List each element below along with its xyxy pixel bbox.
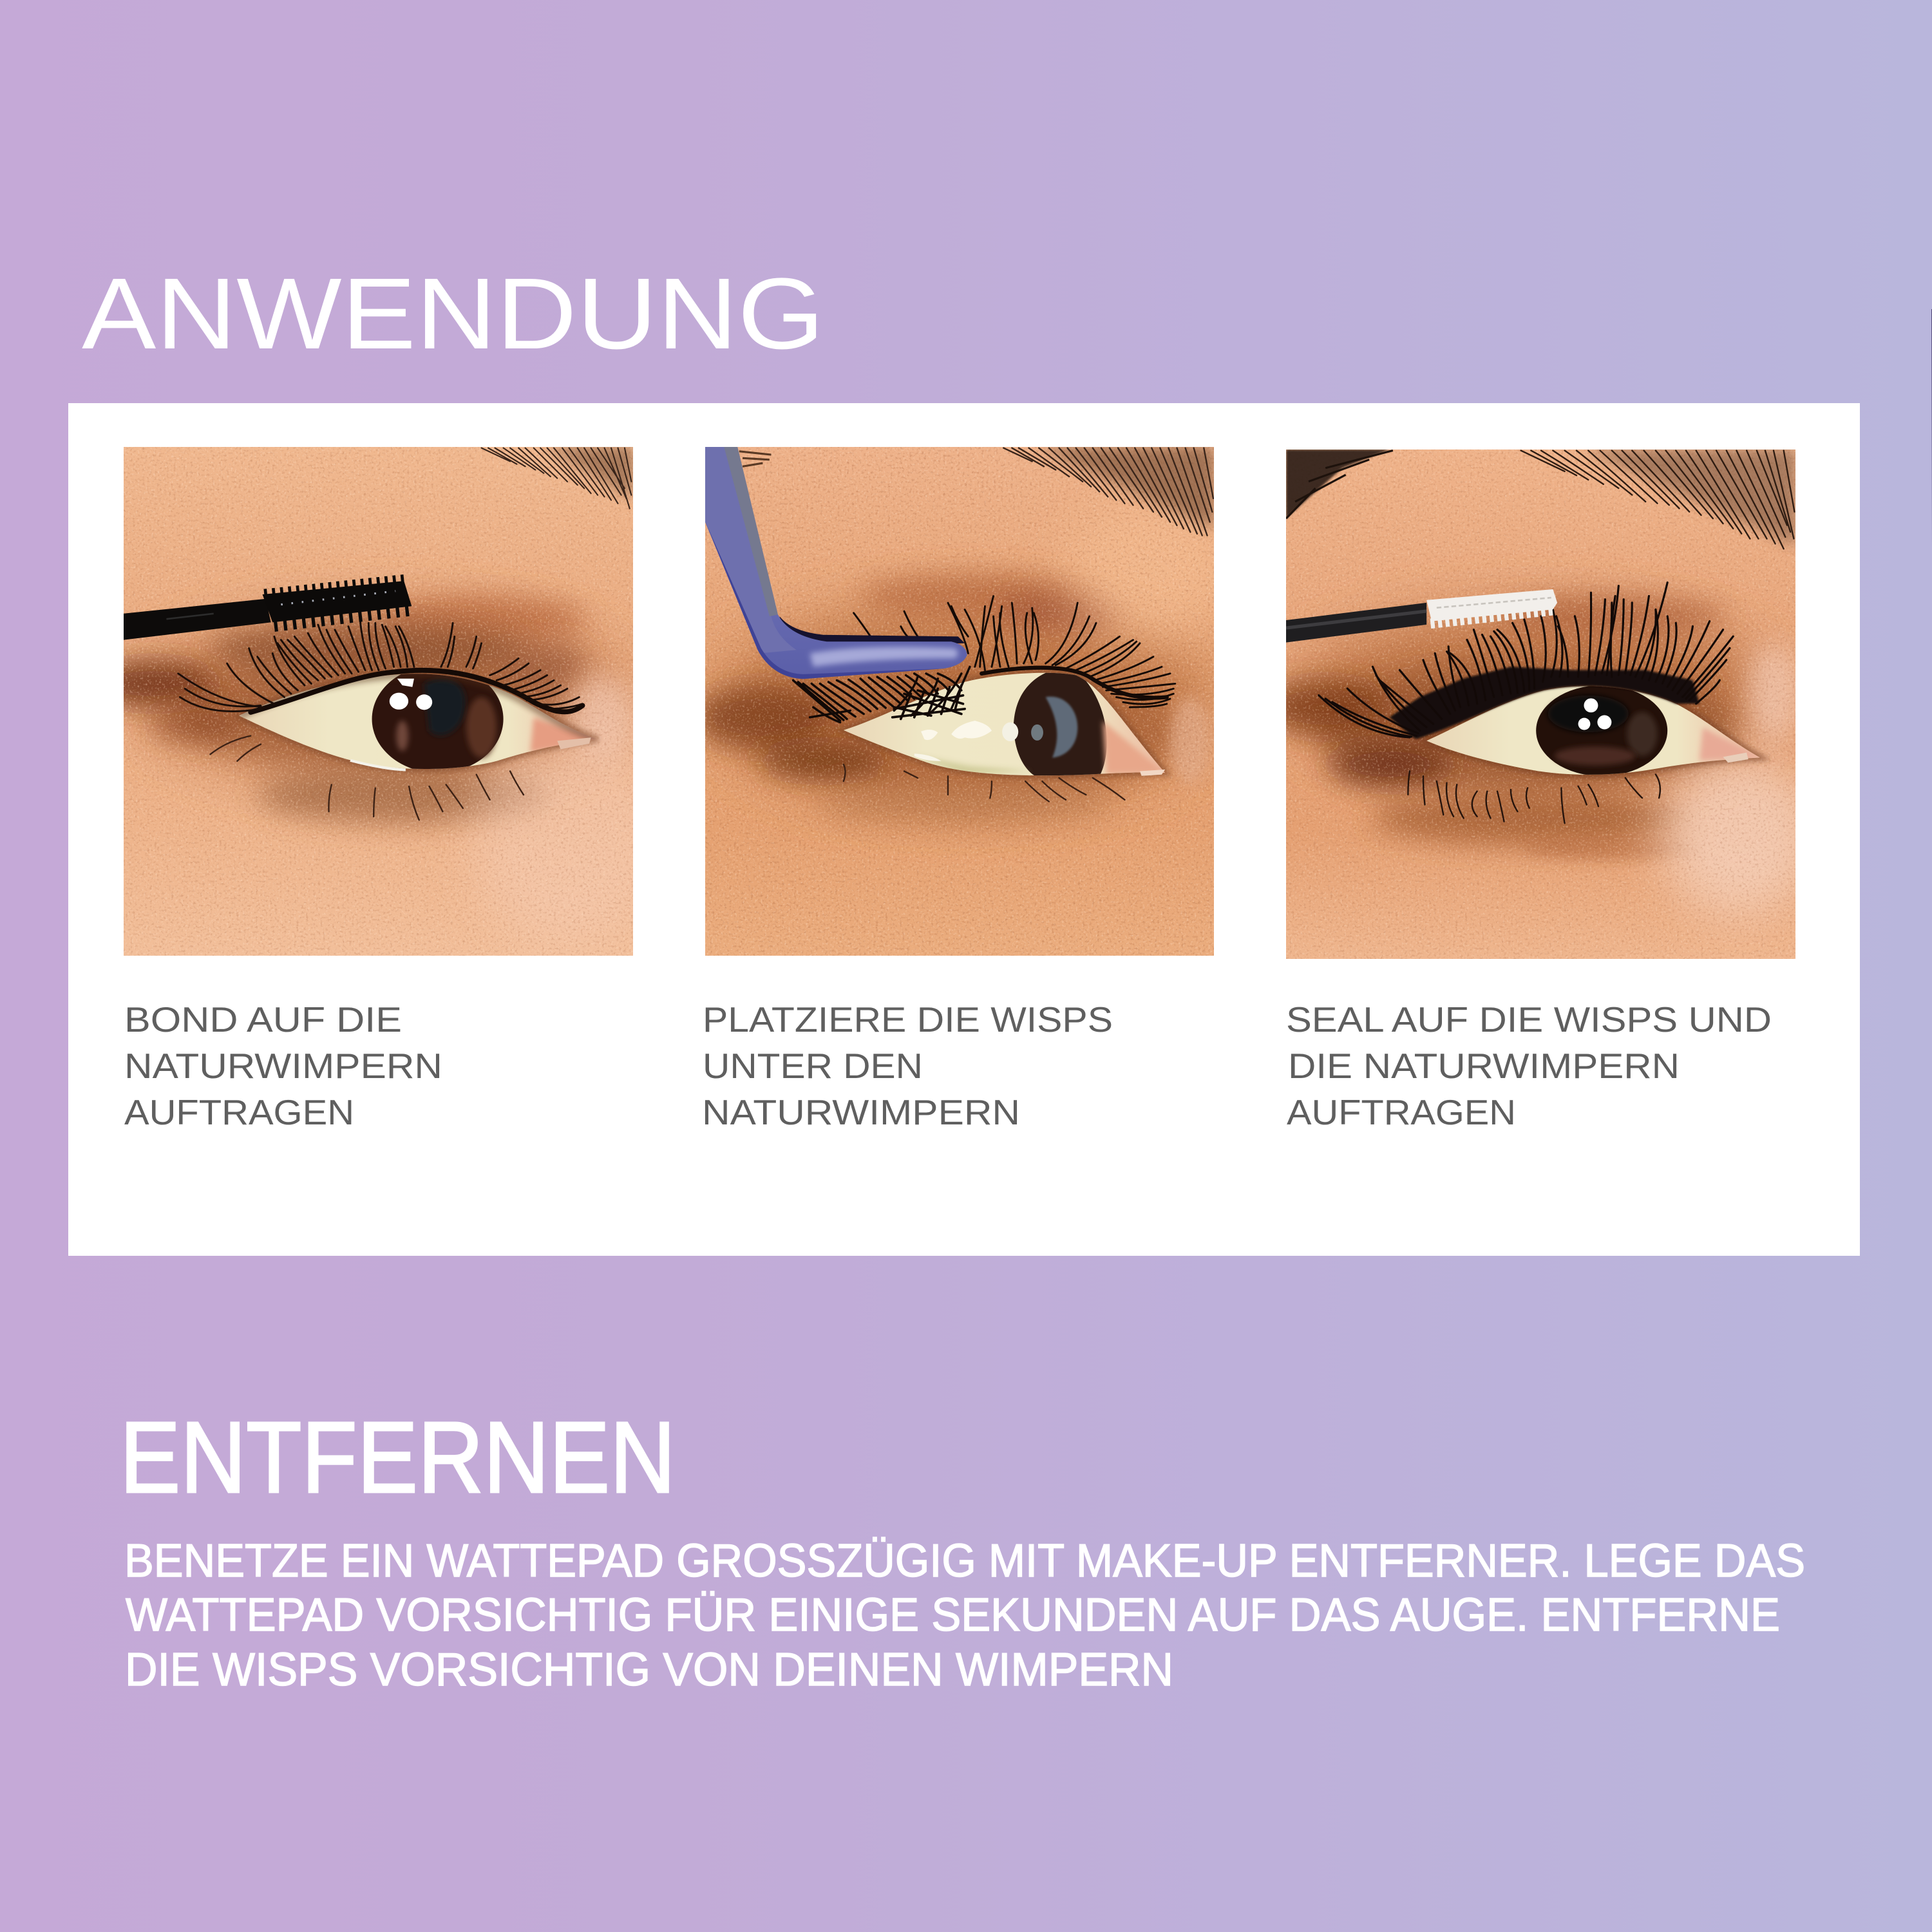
caption: step 2 (702, 999, 1113, 1132)
text block: removal instructions (124, 1535, 1805, 1696)
lower lashes (844, 764, 1124, 802)
upper lashes (981, 668, 1167, 697)
heading: ENTFERNEN: ENTFERNEN (120, 1401, 676, 1514)
white spoolie wand (1286, 589, 1557, 643)
caption: step 1 (124, 999, 442, 1132)
upper lashes (251, 670, 583, 712)
text block: removal instructions: WATTEPAD VORSICHTIG FÜR EINIGE SEKUNDEN AUF DAS AUGE. ENTFERNE (126, 1589, 1780, 1641)
caption: step 3: SEAL AUF DIE WISPS UND (1286, 999, 1772, 1039)
caption: step 3 (1286, 999, 1772, 1132)
caption: step 2: UNTER DEN (703, 1046, 923, 1086)
caption: step 2: NATURWIMPERN (702, 1092, 1020, 1132)
eye (1426, 685, 1760, 776)
lower lashes (210, 736, 524, 820)
caption: step 3: DIE NATURWIMPERN (1288, 1046, 1680, 1086)
lower lashes (1408, 771, 1660, 823)
photo: step 3 white wand applying seal (1286, 450, 1795, 959)
caption: step 1: NATURWIMPERN (124, 1046, 442, 1086)
eyebrow (482, 447, 633, 509)
caption: step 2: PLATZIERE DIE WISPS (703, 999, 1113, 1039)
caption: step 1: BOND AUF DIE (124, 999, 402, 1039)
caption: step 1: AUFTRAGEN (124, 1092, 354, 1132)
photo: step 1 mascara wand applying bond (124, 447, 633, 956)
eye (239, 665, 601, 773)
text block: removal instructions: BENETZE EIN WATTEPAD GROSSZÜGIG MIT MAKE-UP ENTFERNER. LEGE DAS (124, 1535, 1805, 1587)
upper false lashes (1319, 583, 1733, 739)
wisp lash placed under natural lashes (793, 667, 970, 723)
text block: removal instructions: DIE WISPS VORSICHTIG VON DEINEN WIMPERN (125, 1643, 1173, 1696)
photo: step 2 tweezers placing wisps (705, 447, 1214, 956)
caption: step 3: AUFTRAGEN (1287, 1092, 1516, 1132)
panel: application steps (68, 403, 1860, 1256)
heading: ANWENDUNG: ANWENDUNG (82, 258, 824, 370)
eyebrows (1286, 450, 1795, 549)
tweezers (705, 447, 967, 679)
mascara wand (124, 578, 414, 640)
eyebrow (739, 447, 1214, 536)
eye (844, 670, 1165, 776)
